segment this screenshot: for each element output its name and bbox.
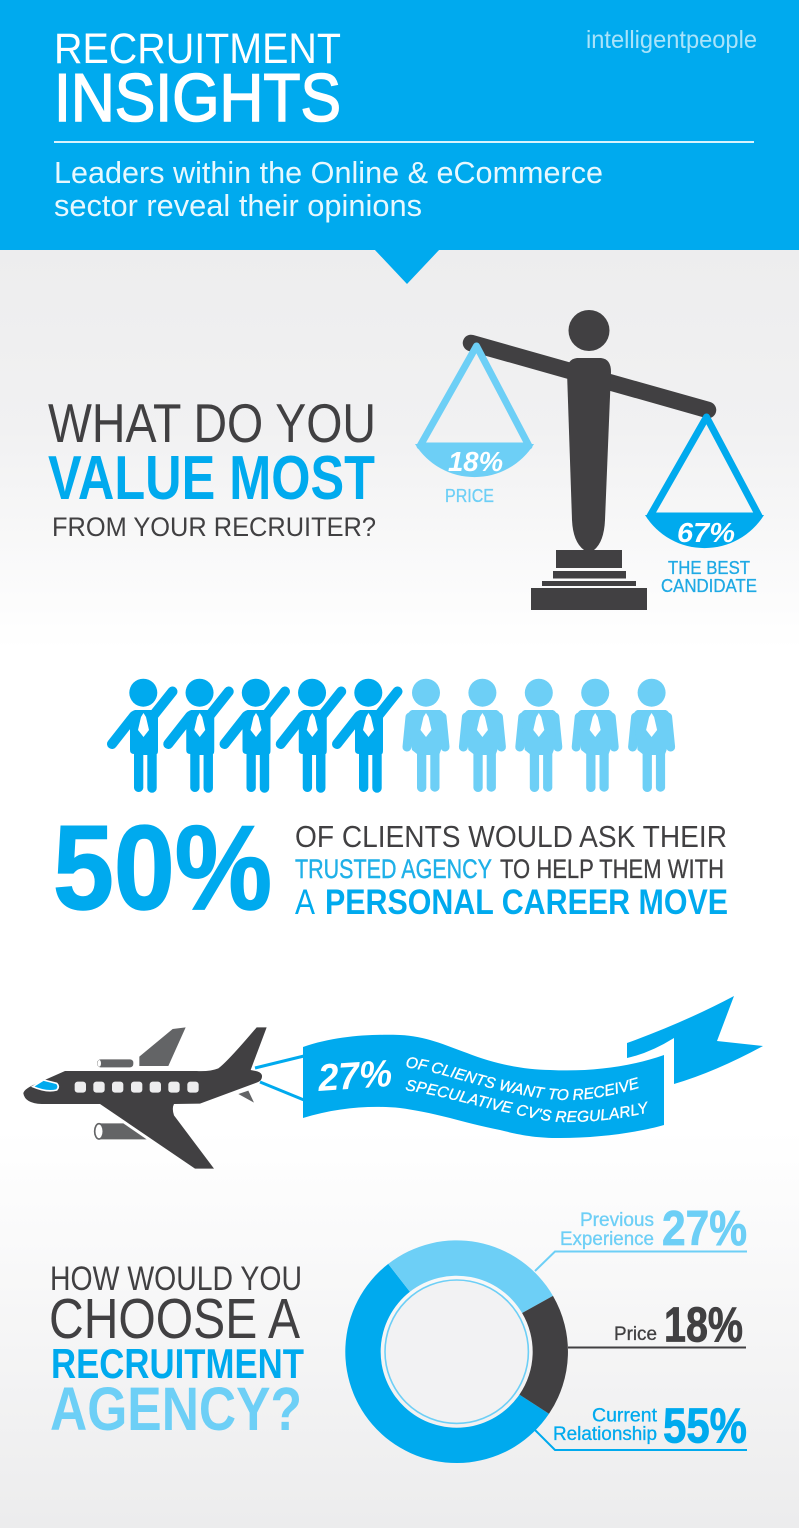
header rule: [54, 141, 754, 143]
upper engine: [97, 1059, 133, 1067]
donut chart: [345, 1240, 568, 1463]
label: price: PRICE: [445, 486, 494, 506]
right scale pan: [645, 417, 764, 548]
segment: previous experience 27%: [388, 1240, 553, 1313]
raised-hand people: [112, 679, 398, 793]
callout: price: Price: [614, 1324, 657, 1345]
label: the best candidate: THE BEST: [668, 558, 750, 578]
callout: previous experience: Experience: [560, 1229, 654, 1250]
callout: current relationship: Current: [592, 1406, 658, 1426]
callout: current relationship: 55%: [663, 1400, 747, 1454]
segment: price 18%: [519, 1296, 568, 1414]
heading: how would you choose a recruitment agency: AGENCY?: [50, 1375, 302, 1443]
heading: what do you value most: FROM YOUR RECRUITER?: [52, 512, 376, 542]
callout: price: [568, 1298, 746, 1352]
label: the best candidate: CANDIDATE: [661, 576, 757, 596]
icon: scales figure: [415, 310, 764, 610]
lower engine: [95, 1123, 147, 1139]
callout: previous experience: [535, 1202, 747, 1271]
heading: how would you choose a recruitment agency: CHOOSE A: [49, 1287, 300, 1351]
banner tail: [627, 996, 763, 1084]
right scale pan: 67%: [677, 517, 735, 548]
ribbon banner: [303, 1034, 664, 1138]
logo: intelligentpeople: [586, 26, 757, 54]
pedestal: [531, 550, 647, 610]
background top gradient: [0, 250, 799, 650]
title line one: RECRUITMENT: [54, 25, 341, 73]
banner ropes: [255, 1056, 304, 1100]
cockpit window: [33, 1080, 58, 1091]
figure body: [567, 358, 611, 550]
panel: header: [0, 0, 799, 284]
tail stabiliser: [238, 1091, 254, 1103]
header band: [0, 0, 799, 250]
heading: what do you value most: [48, 392, 376, 542]
text block: 50% explanation: PERSONAL CAREER MOVE: [325, 883, 728, 922]
header pointer arrow: [374, 249, 440, 284]
subtitle line one: Leaders within the Online & eCommerce: [54, 155, 603, 190]
upper wing: [139, 1027, 186, 1066]
background bottom gradient: [0, 1130, 799, 1528]
callout: current relationship: Relationship: [553, 1424, 657, 1445]
text block: 50% explanation: OF CLIENTS WOULD ASK THEIR: [295, 819, 727, 854]
icon: airplane: [23, 1027, 267, 1169]
inner ring: [385, 1280, 528, 1423]
cabin windows: [75, 1082, 199, 1093]
text block: 50% explanation: TO HELP THEM WITH: [500, 854, 724, 884]
heading: how would you choose a recruitment agency: RECRUITMENT: [51, 1340, 304, 1387]
banner text line two: SPECULATIVE CV'S REGULARLY: [406, 1080, 648, 1122]
callout: previous experience: 27%: [662, 1202, 747, 1256]
text block: 50% explanation: TRUSTED AGENCY: [295, 854, 492, 884]
title line two: INSIGHTS: [54, 60, 341, 136]
heading: how would you choose a recruitment agency: [49, 1260, 304, 1443]
callout: price: 18%: [664, 1298, 743, 1352]
label: the best candidate: [661, 558, 757, 596]
text block: 50% explanation: [295, 819, 728, 922]
callout: previous experience: Previous: [580, 1210, 654, 1231]
fuselage and main wing: [23, 1027, 267, 1169]
heading: what do you value most: VALUE MOST: [48, 444, 375, 513]
callout: current relationship: [535, 1400, 747, 1454]
big stat: 50%: 50%: [53, 801, 272, 935]
icon row: ten people: [112, 679, 671, 793]
left scale pan: [415, 346, 534, 477]
text block: 50% explanation: A: [295, 883, 316, 922]
left scale pan: 18%: [448, 446, 503, 477]
subtitle line two: sector reveal their opinions: [54, 188, 422, 223]
segment: current relationship 55%: [345, 1264, 549, 1463]
balance beam: [471, 343, 708, 410]
banner text line one: OF CLIENTS WANT TO RECEIVE: [406, 1057, 639, 1100]
heading: what do you value most: WHAT DO YOU: [48, 392, 376, 454]
arms-down people: [407, 679, 671, 792]
figure head: [568, 310, 610, 351]
banner stat: 27%: [316, 1053, 393, 1100]
heading: how would you choose a recruitment agency: HOW WOULD YOU: [50, 1260, 302, 1298]
